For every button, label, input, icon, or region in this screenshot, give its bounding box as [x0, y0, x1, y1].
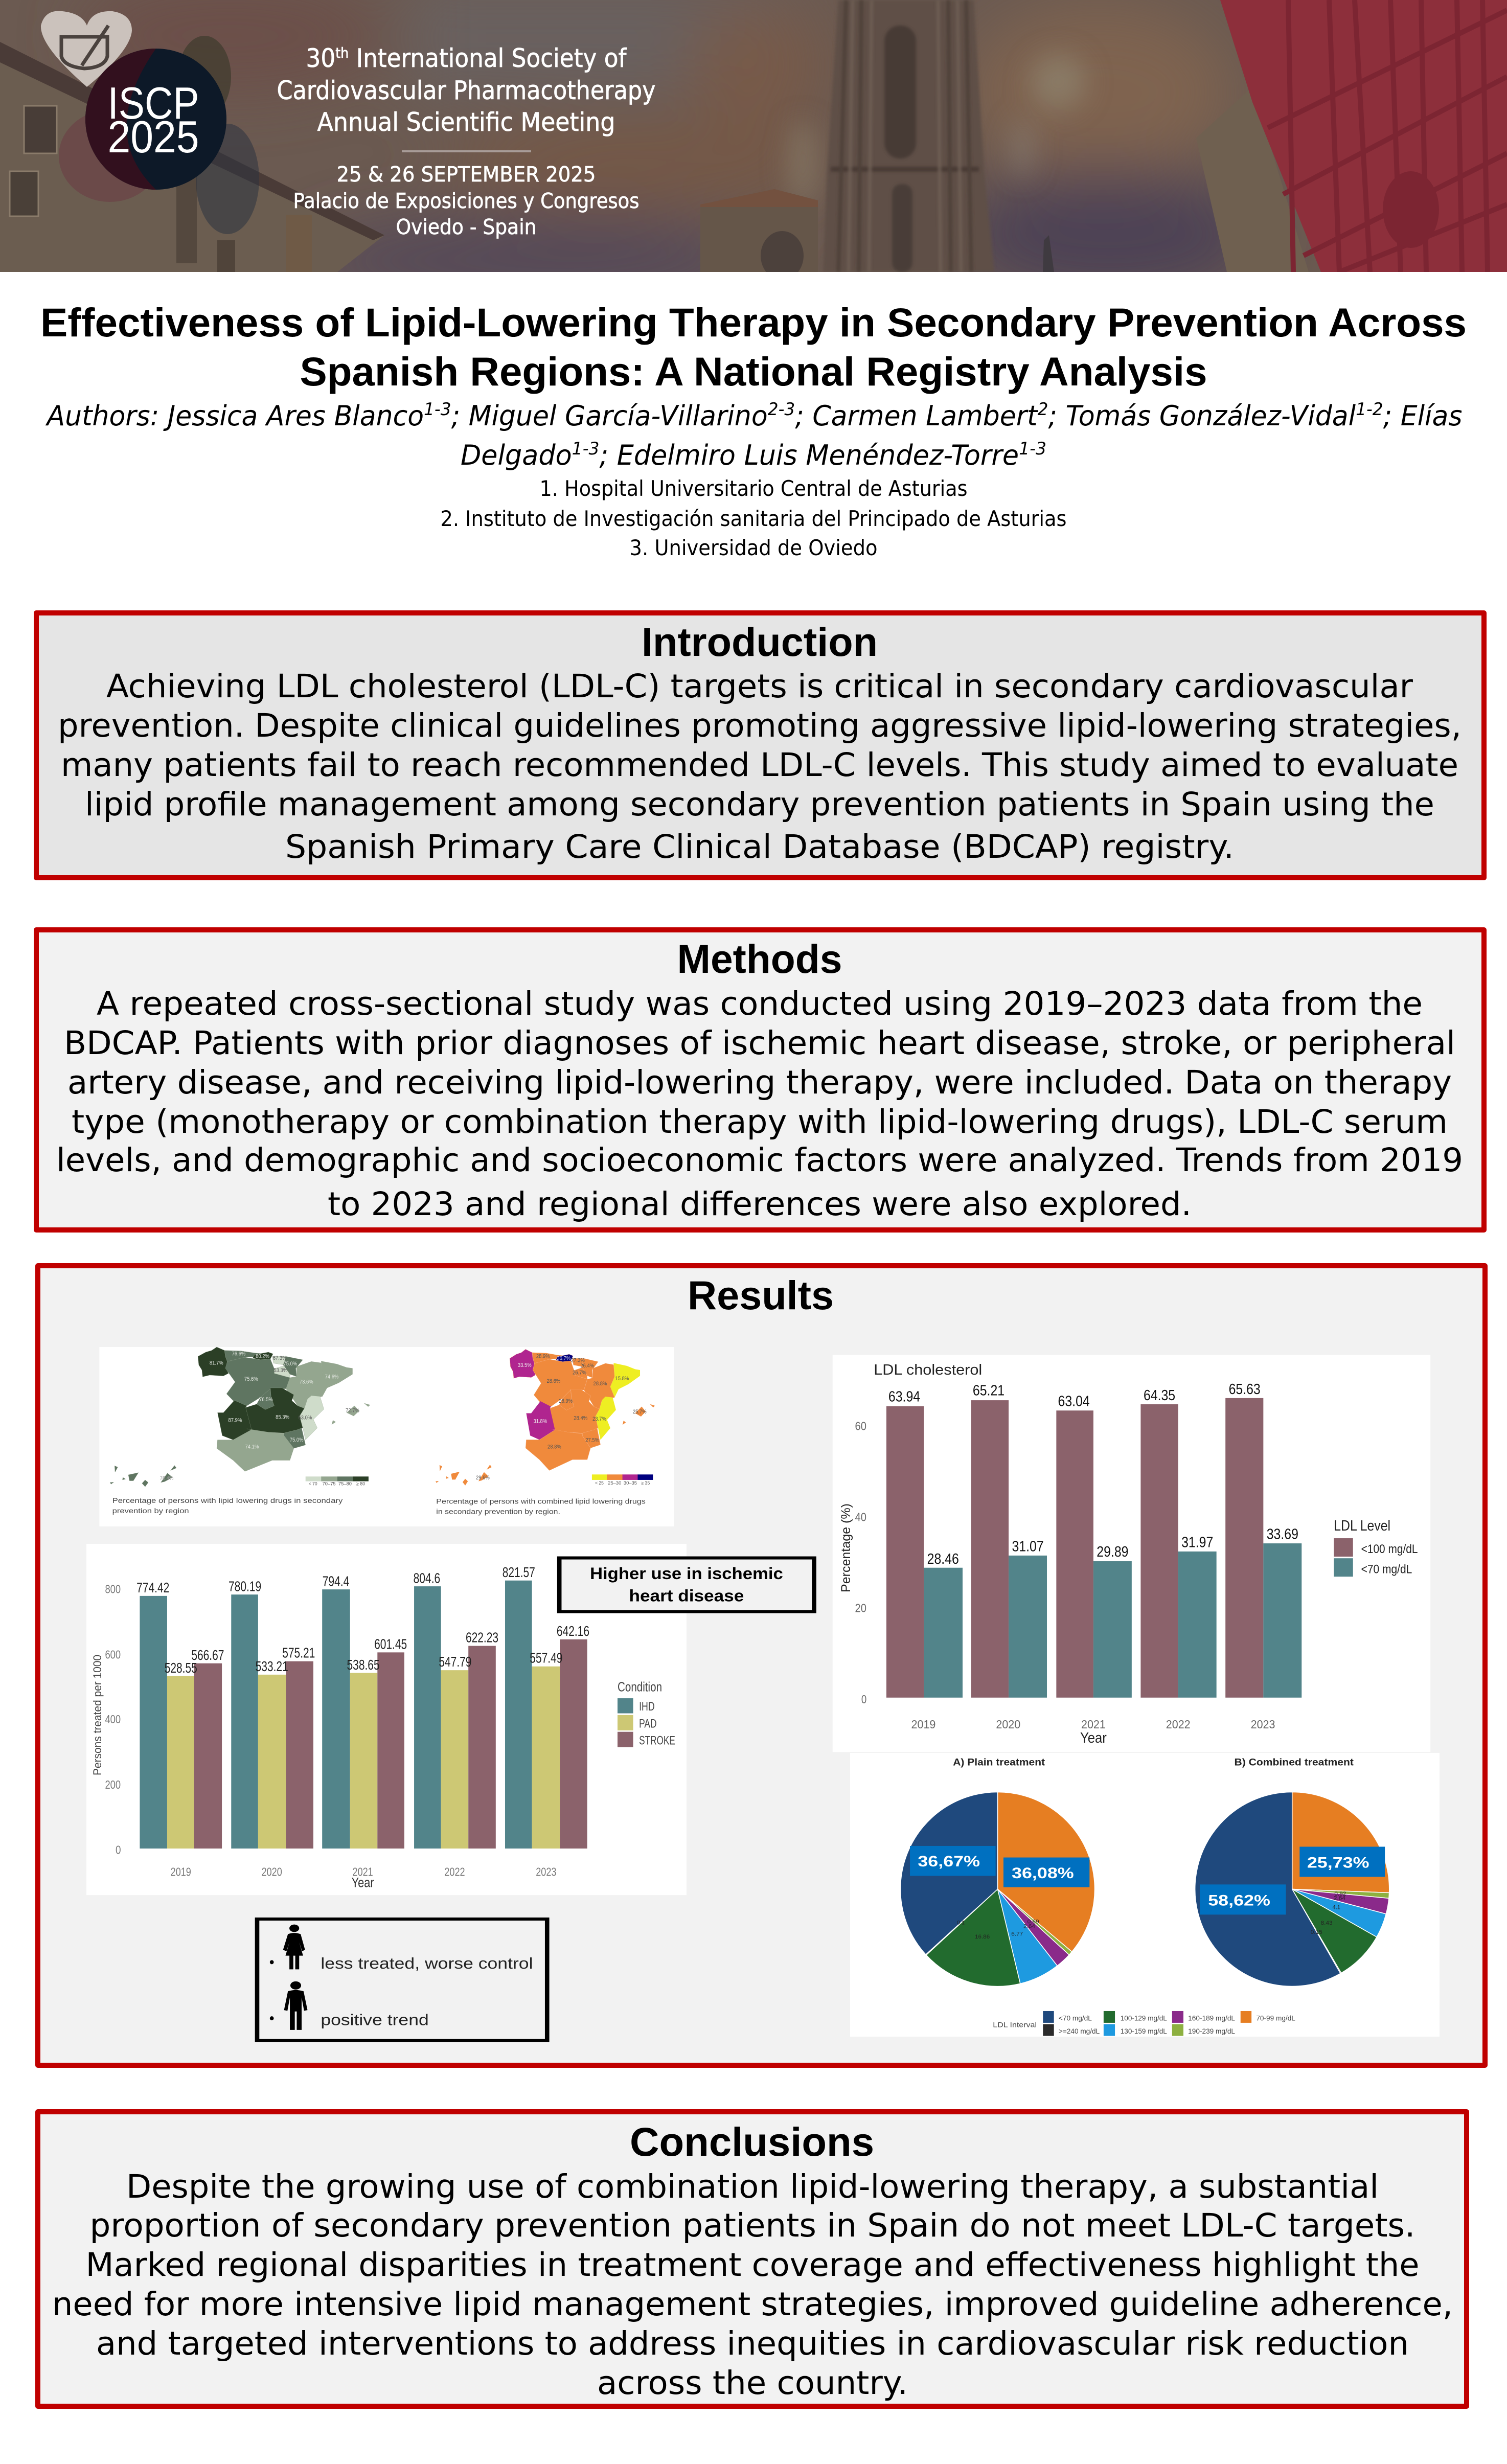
map labels: left: 87.9% — [229, 1417, 242, 1423]
conference details: Cardiovascular Pharmacotherapy — [277, 76, 655, 105]
pie titles — [953, 1757, 1354, 1768]
text: introduction body: prevention. Despite clinical guidelines promoting aggressive lipid-lowering strategies, — [58, 707, 1462, 744]
pie chart: combined treatment — [1195, 1792, 1389, 1987]
text: introduction body: many patients fail to reach recommended LDL-C levels. This study aimed to evaluate — [61, 746, 1458, 784]
pie callout: 36,67%: 36,67% — [918, 1853, 980, 1870]
caption: right map: in secondary prevention by region. — [436, 1508, 560, 1516]
title: Spanish Regions: A National Registry Analysis — [300, 349, 1207, 394]
axis ticks: 60 — [855, 1420, 866, 1433]
caption: right map — [436, 1498, 646, 1516]
axis ticks: 2019 — [171, 1865, 191, 1878]
axis ticks: 2023 — [536, 1865, 556, 1878]
affiliations: 3. Universidad de Oviedo — [630, 535, 877, 560]
text: conclusions body — [52, 2168, 1453, 2402]
map labels: right: 28.6% — [547, 1378, 560, 1384]
pie slice values — [957, 1890, 1346, 1940]
map: lipid lowering drugs by region — [110, 1347, 370, 1487]
map labels: right: 28.8% — [593, 1380, 607, 1387]
axis ticks: 2022 — [1166, 1718, 1191, 1731]
map labels: left: 80.2% — [256, 1353, 269, 1359]
authors: 2 — [1038, 399, 1048, 420]
legend: condition: Condition — [618, 1680, 662, 1694]
pie slice values: 0.92 — [1334, 1890, 1346, 1897]
conference details: Annual Scientific Meeting — [317, 107, 615, 137]
map labels: left: 76.4% — [160, 1475, 173, 1481]
bar value labels: 794.4 — [323, 1573, 349, 1589]
axis ticks: 200 — [105, 1778, 121, 1791]
bar value labels: 566.67 — [191, 1648, 224, 1663]
map labels: right: 28.9% — [536, 1353, 550, 1359]
legend: left map — [306, 1476, 369, 1487]
bar value labels — [888, 1381, 1298, 1567]
axis ticks: 400 — [105, 1713, 121, 1726]
axis ticks: 0 — [861, 1693, 866, 1706]
text: introduction body: lipid profile management among secondary prevention patients in Spain using the — [85, 786, 1434, 823]
axis ticks — [105, 1583, 556, 1878]
text: men: positive trend — [321, 2012, 429, 2029]
bar value labels: 528.55 — [165, 1660, 197, 1676]
caption: left map — [112, 1497, 343, 1515]
panel: LDL pie charts: 70-99 mg/dL — [1256, 2014, 1295, 2022]
pie titles: B) Combined treatment — [1234, 1757, 1354, 1768]
authors: ; Elías — [1383, 400, 1462, 432]
right building and red overlay — [1196, 0, 1507, 272]
legend: condition — [618, 1680, 675, 1747]
map labels: left: 75.0% — [283, 1360, 297, 1367]
legend: right map: ≥ 35 — [641, 1481, 650, 1486]
legend: right map — [592, 1474, 653, 1486]
logo text — [109, 87, 197, 153]
map labels: left: 53.3% — [273, 1367, 287, 1374]
bar value labels: 601.45 — [374, 1636, 407, 1652]
pie slice values: 2.64 — [1334, 1895, 1345, 1901]
legend: right map: < 25 — [595, 1481, 604, 1486]
bar value labels: 575.21 — [282, 1645, 315, 1661]
axis ticks: 2020 — [262, 1865, 282, 1878]
bar value labels: 63.94 — [888, 1388, 920, 1405]
legend: left map: < 70 — [309, 1481, 317, 1487]
heading: introduction: Introduction — [642, 619, 878, 665]
conference details: 25 & 26 SEPTEMBER 2025 — [336, 162, 596, 187]
bars: IHD — [140, 1581, 532, 1849]
legend: LDL interval: 100-129 mg/dL — [1121, 2014, 1167, 2022]
map labels: left: 76.6% — [232, 1351, 245, 1357]
map labels: left: 75.6% — [244, 1376, 258, 1382]
legend: LDL interval: 130-159 mg/dL — [1121, 2027, 1167, 2035]
map labels: right: 15.8% — [615, 1375, 629, 1382]
axis ticks: 2021 — [1081, 1718, 1106, 1731]
legend: LDL level: LDL Level — [1334, 1517, 1390, 1534]
map labels: right: 36.7% — [557, 1355, 570, 1361]
pie slice values: 6.77 — [1011, 1931, 1023, 1937]
pie slice values: 0.15 — [1311, 1929, 1322, 1935]
authors: ; Tomás González-Vidal — [1048, 400, 1356, 432]
bar chart: LDL cholesterol — [833, 1355, 1430, 1752]
map labels: left — [160, 1351, 359, 1481]
bar value labels: 804.6 — [414, 1570, 440, 1586]
map labels: right: 23.7% — [592, 1416, 606, 1422]
bar value labels — [136, 1565, 589, 1676]
callout: sex differences — [257, 1919, 547, 2041]
bar value labels: 533.21 — [256, 1659, 288, 1675]
map labels: left: 67.3% — [273, 1355, 287, 1361]
pie callout: 58,62% — [1200, 1884, 1286, 1914]
authors: 1-3 — [424, 399, 451, 420]
map: combined lipid lowering drugs by region — [436, 1349, 655, 1486]
map labels: left: 63.0% — [299, 1414, 312, 1421]
pie titles: A) Plain treatment — [953, 1757, 1045, 1768]
map labels: left: 76.5% — [259, 1396, 273, 1403]
authors: Authors: Jessica Ares Blanco — [47, 400, 438, 432]
bars: below 70 — [924, 1543, 1302, 1698]
legend: LDL interval: 190-239 mg/dL — [1188, 2027, 1235, 2035]
affiliations: 1. Hospital Universitario Central de Asturias — [540, 476, 967, 501]
map labels: right: 33.5% — [518, 1362, 532, 1368]
authors: 1-2 — [1356, 399, 1383, 420]
legend: LDL interval: >=240 mg/dL — [1059, 2027, 1100, 2035]
legend: left map: 70–75 — [323, 1481, 336, 1487]
caption: left map: prevention by region — [112, 1507, 189, 1515]
logo text: ISCP — [107, 78, 199, 128]
authors — [45, 399, 1462, 471]
axis ticks: 2023 — [1251, 1718, 1275, 1731]
bar value labels: 642.16 — [557, 1624, 589, 1639]
axis title: year: Year — [1080, 1729, 1107, 1746]
left building — [0, 42, 384, 272]
affiliations — [441, 476, 1066, 560]
text: conclusions body: Despite the growing use of combination lipid-lowering therapy, a substantial — [126, 2168, 1379, 2205]
callout: higher use in ischemic heart disease: Higher use in ischemic — [590, 1564, 783, 1583]
axis ticks: 800 — [105, 1583, 121, 1595]
heading: results: Results — [688, 1272, 834, 1318]
map labels: left: 74.1% — [245, 1444, 259, 1450]
icon: woman — [283, 1925, 305, 1969]
text: methods body: type (monotherapy or combination therapy with lipid-lowering drugs), LDL-C serum — [72, 1103, 1448, 1140]
map labels: right: 26.4% — [580, 1362, 594, 1369]
pie callout: 25,73% — [1299, 1846, 1385, 1877]
axis ticks: 2019 — [911, 1718, 935, 1731]
panel: conclusions — [38, 2112, 1467, 2406]
pie slice values: 8.43 — [1321, 1920, 1333, 1926]
authors: 1-3 — [1019, 439, 1046, 459]
text: women: less treated, worse control — [321, 1955, 533, 1972]
text: introduction body — [58, 668, 1462, 865]
title — [40, 300, 1467, 394]
legend: LDL interval: 160-189 mg/dL — [1188, 2014, 1235, 2022]
axis ticks: 0 — [116, 1843, 121, 1857]
axis ticks: 2022 — [444, 1865, 465, 1878]
bars: stroke — [194, 1639, 587, 1849]
axis ticks — [855, 1420, 1275, 1731]
legend: condition: IHD — [639, 1700, 655, 1714]
bar value labels: 774.42 — [136, 1580, 169, 1596]
legend: LDL level: <70 mg/dL — [1361, 1562, 1412, 1576]
conference details: Palacio de Exposiciones y Congresos — [293, 189, 639, 213]
map labels: right: 27.3% — [571, 1357, 585, 1363]
map labels: left: 74.6% — [325, 1374, 338, 1380]
conference details: International Society of — [349, 43, 627, 73]
text: conclusions body: across the country. — [597, 2364, 908, 2402]
legend: left map: ≥ 80 — [356, 1481, 365, 1487]
text: methods body: artery disease, and receiving lipid-lowering therapy, were included. Data on therapy — [67, 1064, 1452, 1101]
callout: higher use in ischemic heart disease: heart disease — [629, 1586, 744, 1605]
pie slice values: 16.86 — [975, 1933, 990, 1940]
bar chart: persons treated per 1000: STROKE — [639, 1733, 675, 1747]
axis title: persons treated: Persons treated per 1000 — [91, 1655, 104, 1775]
map labels: right: 27.5% — [585, 1437, 599, 1443]
cathedral tower — [700, 0, 1054, 280]
bar value labels: 31.97 — [1181, 1534, 1213, 1550]
panel: LDL pie charts — [850, 1753, 1440, 2037]
bar value labels: 65.21 — [973, 1382, 1004, 1399]
text: methods body — [56, 985, 1463, 1223]
bar value labels: 557.49 — [530, 1650, 562, 1666]
pie callout: 36,08%: 36,08% — [1012, 1865, 1074, 1882]
legend: LDL level: <100 mg/dL — [1361, 1542, 1418, 1556]
affiliations: 2. Instituto de Investigación sanitaria del Principado de Asturias — [441, 506, 1066, 531]
bar value labels: 821.57 — [503, 1565, 535, 1581]
map labels: right: 31.8% — [533, 1418, 547, 1424]
icon: man — [284, 1981, 308, 2030]
pie callout: 25,73%: 25,73% — [1307, 1854, 1369, 1871]
legend: LDL interval: <70 mg/dL — [1059, 2014, 1092, 2022]
legend: condition: PAD — [639, 1717, 657, 1730]
logo text: 2025 — [107, 111, 199, 162]
caption: left map: Percentage of persons with lipid lowering drugs in secondary — [112, 1497, 343, 1504]
axis title: percentage: Percentage (%) — [839, 1503, 853, 1592]
map labels: right: 28.8% — [547, 1444, 561, 1450]
callout: higher use in ischemic heart disease — [559, 1558, 814, 1612]
panel: regional maps — [99, 1347, 674, 1526]
logo — [41, 11, 259, 234]
axis title: year: Year — [352, 1875, 374, 1890]
bar value labels: 64.35 — [1144, 1387, 1175, 1403]
heading: conclusions: Conclusions — [630, 2119, 874, 2164]
bar value labels: 29.89 — [1097, 1543, 1128, 1560]
authors: 1-3 — [572, 439, 600, 459]
bar value labels: 65.63 — [1229, 1381, 1261, 1397]
axis ticks: 2021 — [353, 1865, 373, 1878]
bar value labels: 780.19 — [229, 1579, 261, 1594]
panel: methods — [36, 930, 1484, 1230]
bar value labels: 33.69 — [1267, 1526, 1298, 1542]
panel: results — [38, 1266, 1485, 2065]
pie callout: 36,67% — [910, 1846, 996, 1876]
text: introduction body: Spanish Primary Care Clinical Database (BDCAP) registry. — [285, 828, 1234, 865]
pie slice values: 0.1 — [957, 1919, 965, 1926]
conference details: 30 — [306, 43, 338, 73]
pie slice values: 2.64 — [1023, 1923, 1035, 1929]
map labels: left: 75.0% — [290, 1436, 303, 1443]
text: methods body: levels, and demographic and socioeconomic factors were analyzed. Trends from 2019 — [56, 1142, 1463, 1179]
text: conclusions body: need for more intensive lipid management strategies, improved guideline adherence, — [52, 2286, 1453, 2323]
bar value labels: 31.07 — [1012, 1538, 1044, 1555]
conference details: Oviedo - Spain — [396, 215, 537, 239]
conference details: th — [335, 44, 349, 61]
bars: PAD — [167, 1667, 560, 1849]
bar value labels: 63.04 — [1058, 1393, 1090, 1409]
map labels: right: 26.9% — [559, 1398, 573, 1404]
legend: left map: 75–80 — [338, 1481, 352, 1487]
text: conclusions body: and targeted interventions to address inequities in cardiovascular risk reduction — [96, 2325, 1409, 2362]
axis ticks: 40 — [855, 1511, 866, 1524]
bar chart: persons treated per 1000 — [86, 1544, 687, 1895]
text: methods body: A repeated cross-sectional study was conducted using 2019–2023 data from the — [97, 985, 1423, 1022]
axis ticks: 2020 — [996, 1718, 1020, 1731]
axis ticks: 600 — [105, 1648, 121, 1661]
axis ticks: 20 — [855, 1602, 866, 1615]
text: conclusions body: Marked regional disparities in treatment coverage and effectiveness highlight the — [86, 2246, 1419, 2284]
header banner — [0, 0, 1507, 272]
bar value labels: 547.79 — [439, 1654, 471, 1670]
text: methods body: to 2023 and regional differences were also explored. — [328, 1185, 1192, 1223]
authors: ; Edelmiro Luis Menéndez-Torre — [600, 439, 1019, 471]
bar value labels: 28.46 — [927, 1550, 959, 1567]
legend: LDL interval: LDL Interval — [993, 2021, 1037, 2029]
map labels: left: 81.7% — [210, 1360, 223, 1366]
map labels: right: 26.7% — [573, 1370, 586, 1376]
authors: ; Carmen Lambert — [795, 400, 1038, 432]
text: introduction body: Achieving LDL cholesterol (LDL-C) targets is critical in secondary cardiovascular — [106, 668, 1413, 705]
legend: LDL level — [1334, 1517, 1418, 1577]
heading: methods: Methods — [677, 936, 842, 982]
map labels: right — [476, 1353, 647, 1481]
pie callout: 58,62%: 58,62% — [1208, 1892, 1270, 1909]
title: Effectiveness of Lipid-Lowering Therapy in Secondary Prevention Across — [40, 300, 1467, 345]
legend: LDL interval — [993, 2011, 1295, 2036]
chart title: LDL cholesterol — [874, 1361, 982, 1378]
legend: right map: 30–35 — [624, 1481, 637, 1486]
map labels: left: 73.6% — [300, 1379, 313, 1385]
authors: 2-3 — [768, 399, 795, 420]
authors: Delgado — [461, 439, 575, 471]
panel: regional maps: 25.7% — [633, 1408, 647, 1415]
bars: below 100 — [886, 1398, 1263, 1698]
pie slice values: 4.1 — [1333, 1904, 1340, 1910]
authors: ; Miguel García-Villarino — [451, 400, 768, 432]
map labels: right: 28.4% — [574, 1415, 587, 1421]
pie chart: plain treatment — [901, 1792, 1094, 1987]
map labels: left: 85.3% — [276, 1414, 289, 1420]
pie callout: 36,08% — [1003, 1858, 1089, 1887]
text: methods body: BDCAP. Patients with prior diagnoses of ischemic heart disease, stroke, or peripheral — [64, 1024, 1455, 1062]
bar value labels: 622.23 — [466, 1630, 498, 1646]
pie slice values: 0.69 — [1028, 1918, 1039, 1925]
text: conclusions body: proportion of secondary prevention patients in Spain do not meet LDL-C targets. — [90, 2207, 1415, 2244]
panel: introduction — [36, 613, 1484, 878]
legend: right map: 25–30 — [608, 1481, 621, 1486]
bar value labels: 538.65 — [347, 1657, 380, 1673]
map labels: right: 29.6% — [476, 1474, 490, 1481]
conference details — [277, 43, 655, 239]
panel: regional maps: 72.7% — [346, 1407, 359, 1413]
panel: regional maps: Percentage of persons with combined lipid lowering drugs — [436, 1498, 646, 1505]
